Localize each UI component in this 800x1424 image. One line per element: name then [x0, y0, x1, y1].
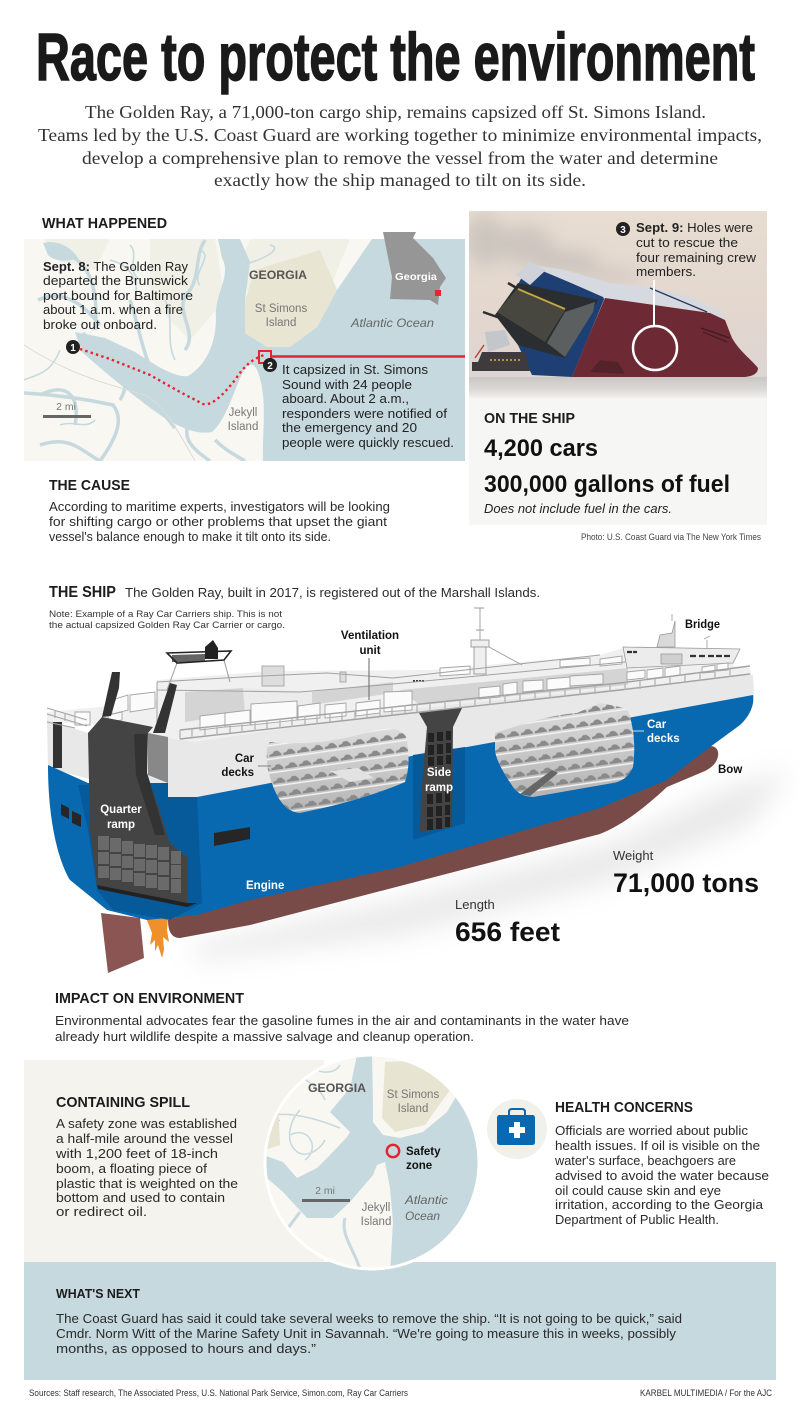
inset: Georgia state shape [383, 232, 446, 305]
rudder [101, 913, 144, 973]
text: Sept. 8: about 1 a.m. when a fire [43, 303, 183, 317]
stat: length [455, 897, 560, 947]
label: car decks left: Car [235, 753, 255, 765]
callout line to photo [271, 355, 465, 358]
brown lower hull [168, 746, 718, 938]
ship deck [528, 264, 732, 338]
circular map labels [308, 1083, 448, 1228]
tug boat [472, 352, 530, 371]
map labels: Island [266, 317, 296, 329]
panel: containing spill background [24, 1060, 324, 1262]
text: health concerns: water's surface, beachgoers are [554, 1153, 736, 1168]
stat: weight: 71,000 tons [613, 868, 759, 898]
grey door panel [148, 733, 168, 783]
panel: what's next: The Coast Guard has said it could take several weeks to remove the ship. “It is not going to be quick,” said [56, 1311, 682, 1326]
text: containing spill [55, 1094, 238, 1219]
label: car decks right: Car [647, 719, 667, 731]
text: capsized: Sound with 24 people [282, 378, 412, 392]
text: health concerns: advised to avoid the water because [555, 1168, 769, 1183]
intro text: The Golden Ray, a 71,000-ton cargo ship, remains capsized off St. Simons Island. [85, 102, 706, 122]
section heading: the ship: THE SHIP [49, 584, 116, 601]
car deck cutout right [495, 703, 634, 797]
text: containing spill: CONTAINING SPILL [56, 1094, 190, 1111]
intro text: Teams led by the U.S. Coast Guard are working together to minimize environmental impacts, [38, 125, 762, 145]
circular map: safety zone [263, 1054, 480, 1275]
light grey hull band [47, 675, 754, 800]
marker 1: 1 [70, 343, 76, 354]
blue hull [505, 265, 605, 377]
panel: what's next: months, as opposed to hours and days.” [56, 1341, 316, 1356]
text: containing spill: or redirect oil. [56, 1204, 147, 1219]
panel: what's next: WHAT'S NEXT [56, 1286, 140, 1301]
text: capsized: responders were notified of [282, 407, 448, 421]
circular map labels: Island [398, 1103, 428, 1115]
circular map labels: Safety [406, 1146, 441, 1158]
section: the cause: According to maritime experts, investigators will be looking [49, 499, 390, 514]
text: Sept. 8 [43, 260, 193, 332]
dotted route [80, 349, 264, 404]
map labels: Jekyll [229, 407, 257, 419]
icon: medical kit [487, 1099, 547, 1159]
text: Sept. 8: broke out onboard. [43, 318, 157, 332]
label: car decks right [632, 719, 680, 745]
inset: Georgia state shape: Georgia [395, 271, 437, 283]
text: capsized: aboard. About 2 a.m., [282, 392, 409, 406]
scale bar: 2 mi [56, 401, 76, 413]
stat: weight [613, 848, 759, 898]
circular map labels: GEORGIA [308, 1083, 366, 1095]
text: capsized: It capsized in St. Simons [282, 363, 428, 377]
quarter ramp [88, 672, 197, 907]
stern hatches [61, 804, 250, 846]
label: bridge: Bridge [685, 619, 720, 631]
section: impact on environment [55, 990, 629, 1044]
ship illustration [47, 608, 790, 973]
section heading: the ship: The Golden Ray, built in 2017, is registered out of the Marshall Islands. [125, 585, 540, 600]
dark blue shading [78, 783, 202, 920]
marker 3: 3 [620, 225, 626, 236]
section: the cause: THE CAUSE [49, 477, 130, 494]
panel: on the ship [469, 398, 767, 525]
text: Sept. 8: port bound for Baltimore [43, 289, 193, 303]
stat: length: Length [455, 897, 495, 912]
label: side ramp: Side [427, 767, 451, 779]
intro text: develop a comprehensive plan to remove the vessel from the water and determine [82, 148, 718, 168]
label: side ramp [425, 767, 453, 794]
footer: sources: Sources: Staff research, The Associated Press, U.S. National Park Service, Simon.com, Ray Car Carriers [29, 1388, 408, 1398]
map labels: Atlantic Ocean [350, 318, 434, 330]
section: impact on environment: already hurt wildlife despite a massive salvage and cleanup operation. [55, 1029, 474, 1044]
text: health concerns: irritation, according to the Georgia [555, 1197, 764, 1212]
map: route of the Golden Ray [24, 232, 465, 461]
text: Sept. 9: cut to rescue the [636, 236, 738, 250]
safety zone marker [387, 1145, 399, 1157]
scale bar [43, 401, 91, 418]
stern deck structure [47, 648, 753, 745]
text: containing spill: a half-mile around the vessel [56, 1131, 233, 1146]
text: health concerns: oil could cause skin and eye [555, 1183, 721, 1198]
ground shadow [190, 770, 790, 960]
capsize location marker [259, 351, 271, 363]
label: car decks right: decks [647, 733, 680, 745]
note: the actual capsized Golden Ray Car Carrier or cargo. [49, 620, 285, 630]
intro text [38, 102, 762, 190]
propeller flame [146, 918, 169, 958]
text: health concerns [554, 1099, 769, 1227]
map labels: St Simons [255, 303, 307, 315]
text: health concerns: Department of Public Health. [555, 1212, 719, 1227]
highlight circle and leader [633, 280, 677, 370]
marker 2: 2 [267, 361, 273, 372]
panel: on the ship: ON THE SHIP [484, 410, 575, 427]
label: car decks left [221, 753, 271, 779]
text: capsized: people were quickly rescued. [282, 436, 454, 450]
label: side ramp: ramp [425, 782, 453, 794]
marker 3 [616, 222, 630, 236]
map labels [228, 270, 434, 433]
panel: what's next: Cmdr. Norm Witt of the Marine Safety Unit in Savannah. “We're going to measure this in weeks, possibly [56, 1326, 677, 1341]
text: containing spill: A safety zone was established [56, 1116, 237, 1131]
text: capsized [282, 363, 454, 450]
text: Sept. 8: departed the Brunswick [43, 274, 189, 288]
circular map labels: Atlantic [404, 1195, 448, 1207]
marker 1 [66, 340, 80, 354]
note [49, 609, 285, 630]
text: Sept. 9: four remaining crew [636, 251, 757, 265]
scale bar: 2 mi [315, 1185, 335, 1197]
marker 2 [263, 358, 277, 372]
panel: on the ship: 4,200 cars [484, 435, 598, 462]
text: Sept. 9 [636, 221, 757, 279]
text: containing spill: boom, a floating piece of [56, 1161, 207, 1176]
label: engine: Engine [246, 880, 284, 892]
stern lookout [167, 640, 231, 690]
circular map labels: Ocean [405, 1211, 440, 1223]
bridge [623, 614, 740, 668]
text: containing spill: with 1,200 feet of 18-inch [55, 1146, 218, 1161]
side ramp [419, 708, 462, 832]
grey walls [185, 668, 628, 722]
label: ventilation unit [341, 630, 399, 700]
text: health concerns: Officials are worried about public [555, 1123, 749, 1138]
cargo ramp [495, 283, 598, 358]
text: Sept. 9: members. [636, 265, 696, 279]
section: impact on environment: Environmental advocates fear the gasoline fumes in the air and contaminants in the water have [55, 1013, 629, 1028]
label: ventilation unit: Ventilation [341, 630, 399, 642]
mast [471, 608, 522, 674]
panel: on the ship: Does not include fuel in the cars. [484, 502, 672, 516]
circular map labels: Jekyll [362, 1202, 390, 1214]
deck blocks [75, 656, 728, 730]
text: Sept. 9: Sept. 9: Holes were [636, 221, 753, 235]
footer: credit: KARBEL MULTIMEDIA / For the AJC [640, 1388, 772, 1398]
section: the cause: for shifting cargo or other problems that upset the giant [49, 514, 387, 529]
label: quarter ramp: Quarter [100, 804, 142, 816]
red hull [572, 298, 758, 377]
text: health concerns: HEALTH CONCERNS [555, 1099, 693, 1116]
scale bar [302, 1185, 350, 1202]
label: quarter ramp: ramp [107, 819, 135, 831]
text: containing spill: bottom and used to contain [56, 1190, 225, 1205]
section: impact on environment: IMPACT ON ENVIRONMENT [55, 990, 244, 1007]
stat: length: 656 feet [455, 917, 560, 947]
panel: what's next [24, 1262, 776, 1380]
car deck cutout left [267, 728, 409, 813]
section: the cause: vessel's balance enough to make it tilt onto its side. [49, 529, 331, 544]
label: bow: Bow [718, 764, 742, 776]
circular map labels: Island [361, 1216, 391, 1228]
label: ventilation unit: unit [359, 645, 381, 657]
circular map labels: zone [406, 1160, 432, 1172]
text: Sept. 8: Sept. 8: The Golden Ray [43, 260, 189, 274]
text: capsized: the emergency and 20 [282, 421, 417, 435]
map labels: Island [228, 421, 258, 433]
text: containing spill: plastic that is weighted on the [56, 1176, 238, 1191]
label: quarter ramp [100, 804, 142, 831]
photo: capsized ship [465, 211, 767, 398]
deck railings [47, 655, 750, 739]
heading: what happened: WHAT HAPPENED [42, 215, 167, 232]
circular map labels: St Simons [387, 1089, 439, 1101]
stat: weight: Weight [613, 848, 654, 863]
label: car decks left: decks [221, 767, 254, 779]
section: the cause [49, 477, 390, 544]
panel: on the ship: 300,000 gallons of fuel [484, 471, 730, 498]
intro text: exactly how the ship managed to tilt on its side. [214, 170, 586, 190]
blue hull [48, 695, 753, 920]
note: Note: Example of a Ray Car Carriers ship. This is not [49, 609, 283, 619]
map labels: GEORGIA [249, 270, 307, 282]
photo credit: Photo: U.S. Coast Guard via The New York Times [581, 532, 761, 542]
text: health concerns: health issues. If oil is visible on the [555, 1138, 760, 1153]
